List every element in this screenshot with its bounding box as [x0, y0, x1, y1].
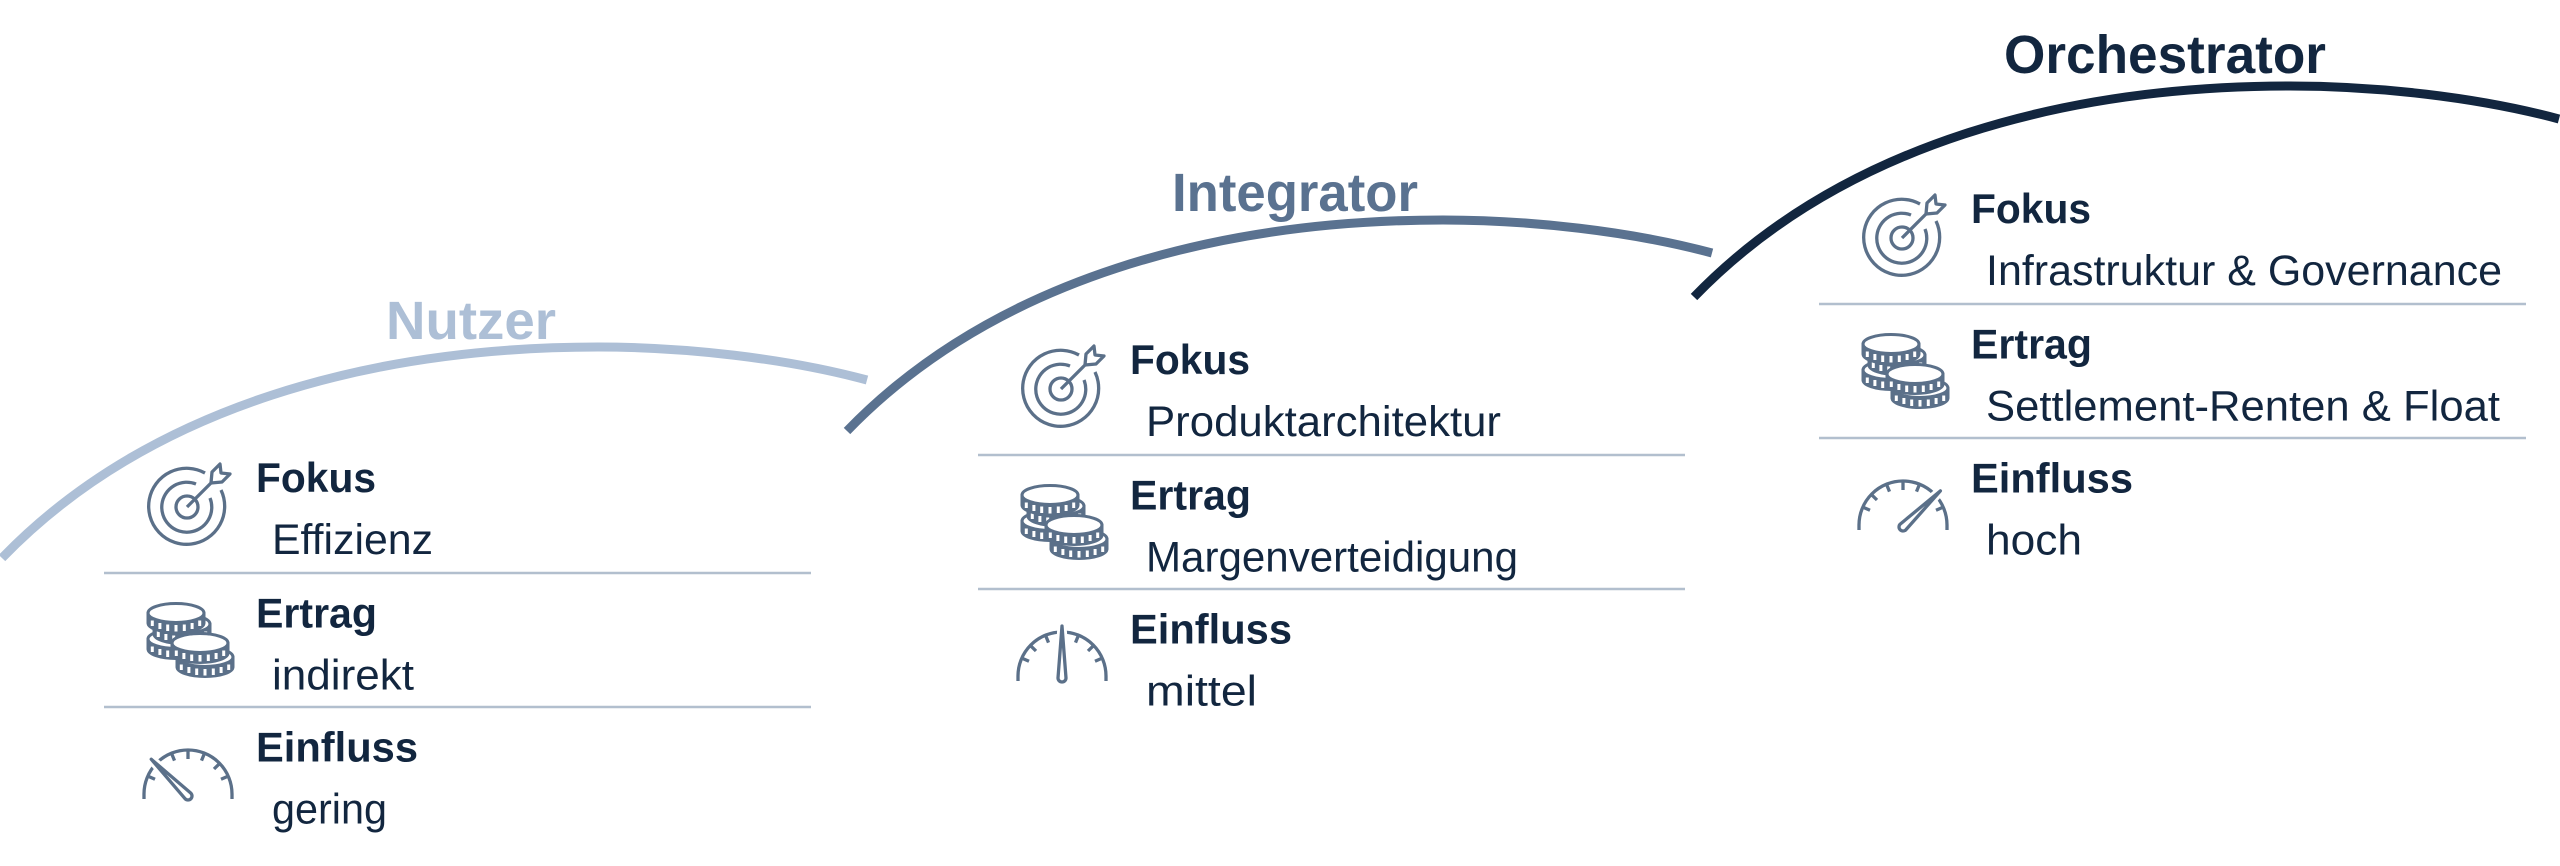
icon: coins	[1863, 334, 1948, 408]
row: Fokus Infrastruktur & Governance	[1864, 185, 2502, 295]
label: Einfluss: Einfluss	[1130, 606, 1292, 652]
label: Ertrag: Ertrag	[256, 590, 377, 636]
panel: Orchestrator	[1694, 25, 2559, 564]
label: Einfluss: Einfluss	[256, 724, 418, 770]
icon: gauge high	[1859, 481, 1947, 533]
icon: coins	[148, 604, 233, 676]
label: Ertrag: Ertrag	[1971, 320, 2092, 368]
label: Fokus: Fokus	[256, 454, 376, 501]
row: Ertrag indirekt	[148, 590, 414, 700]
label: Fokus: Fokus	[1971, 185, 2091, 232]
value: Effizienz: Effizienz	[272, 516, 433, 564]
row: Einfluss hoch	[1859, 454, 2133, 564]
label: Ertrag: Ertrag	[1130, 472, 1251, 518]
row: Einfluss mittel	[1018, 606, 1292, 716]
row: Ertrag Settlement-Renten & Float	[1863, 320, 2500, 430]
row: Einfluss gering	[144, 724, 418, 834]
label: Fokus: Fokus	[1130, 336, 1250, 383]
row: Ertrag Margenverteidigung	[1022, 472, 1518, 582]
value: mittel: mittel	[1146, 668, 1257, 716]
value: Produktarchitektur: Produktarchitektur	[1146, 398, 1501, 446]
arc: Integrator	[847, 220, 1712, 431]
title: Integrator: Integrator	[1172, 163, 1418, 223]
row: Fokus Effizienz	[149, 454, 433, 564]
block: Integrator rows	[978, 336, 1685, 716]
row: Fokus Produktarchitektur	[1023, 336, 1501, 446]
icon: target	[1864, 195, 1945, 275]
title: Orchestrator: Orchestrator	[2004, 25, 2326, 85]
icon: gauge medium	[1018, 626, 1106, 682]
arc: Nutzer	[2, 347, 867, 558]
panel: Integrator	[847, 163, 1712, 716]
icon: coins	[1022, 486, 1107, 558]
arc: Orchestrator	[1694, 86, 2559, 297]
label: Einfluss: Einfluss	[1971, 454, 2133, 502]
icon: gauge low	[144, 750, 232, 802]
icon: target	[1023, 346, 1104, 426]
value: Infrastruktur & Governance: Infrastruktur & Governance	[1986, 247, 2502, 295]
title: Nutzer: Nutzer	[386, 291, 556, 351]
value: indirekt: indirekt	[272, 652, 414, 700]
value: Margenverteidigung: Margenverteidigung	[1146, 534, 1518, 582]
panel: Nutzer	[2, 291, 867, 834]
value: gering: gering	[272, 786, 387, 834]
block: Orchestrator rows	[1819, 185, 2526, 564]
icon: target	[149, 464, 230, 544]
value: hoch: hoch	[1986, 516, 2082, 564]
value: Settlement-Renten & Float: Settlement-Renten & Float	[1986, 382, 2500, 430]
